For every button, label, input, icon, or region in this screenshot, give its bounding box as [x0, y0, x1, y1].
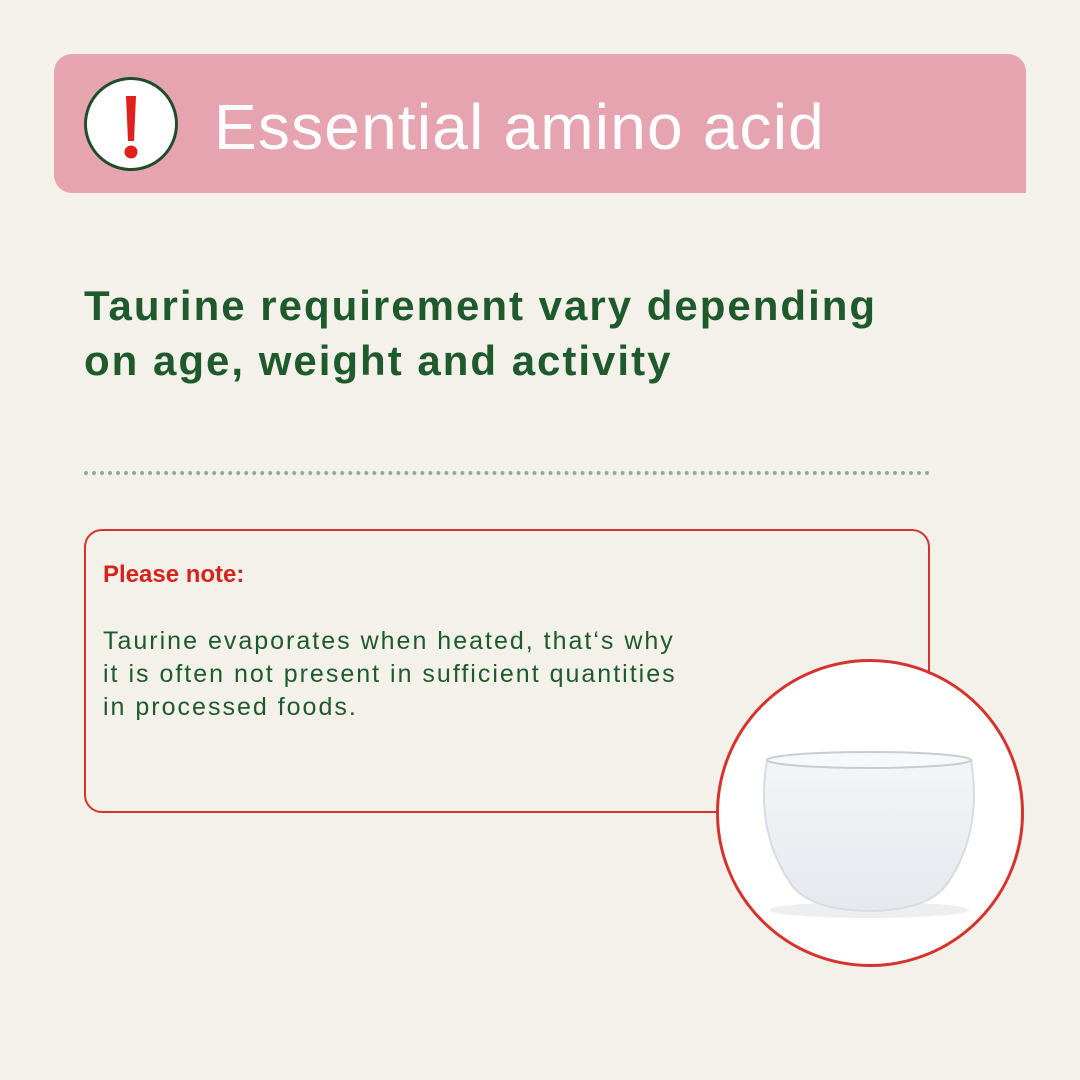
- header banner: [54, 54, 1026, 193]
- image: bowl of taurine powder: [716, 659, 1024, 967]
- note text: Taurine evaporates when heated, that‘s why it is often not present in sufficient quantities in processed foods.: [103, 627, 677, 721]
- note heading: Please note:: [103, 561, 244, 588]
- note box: [84, 529, 930, 813]
- title: Essential amino acid: [214, 91, 825, 163]
- icon: exclamation: [84, 77, 178, 171]
- subtitle: Taurine requirement vary depending on age, weight and activity: [84, 282, 877, 384]
